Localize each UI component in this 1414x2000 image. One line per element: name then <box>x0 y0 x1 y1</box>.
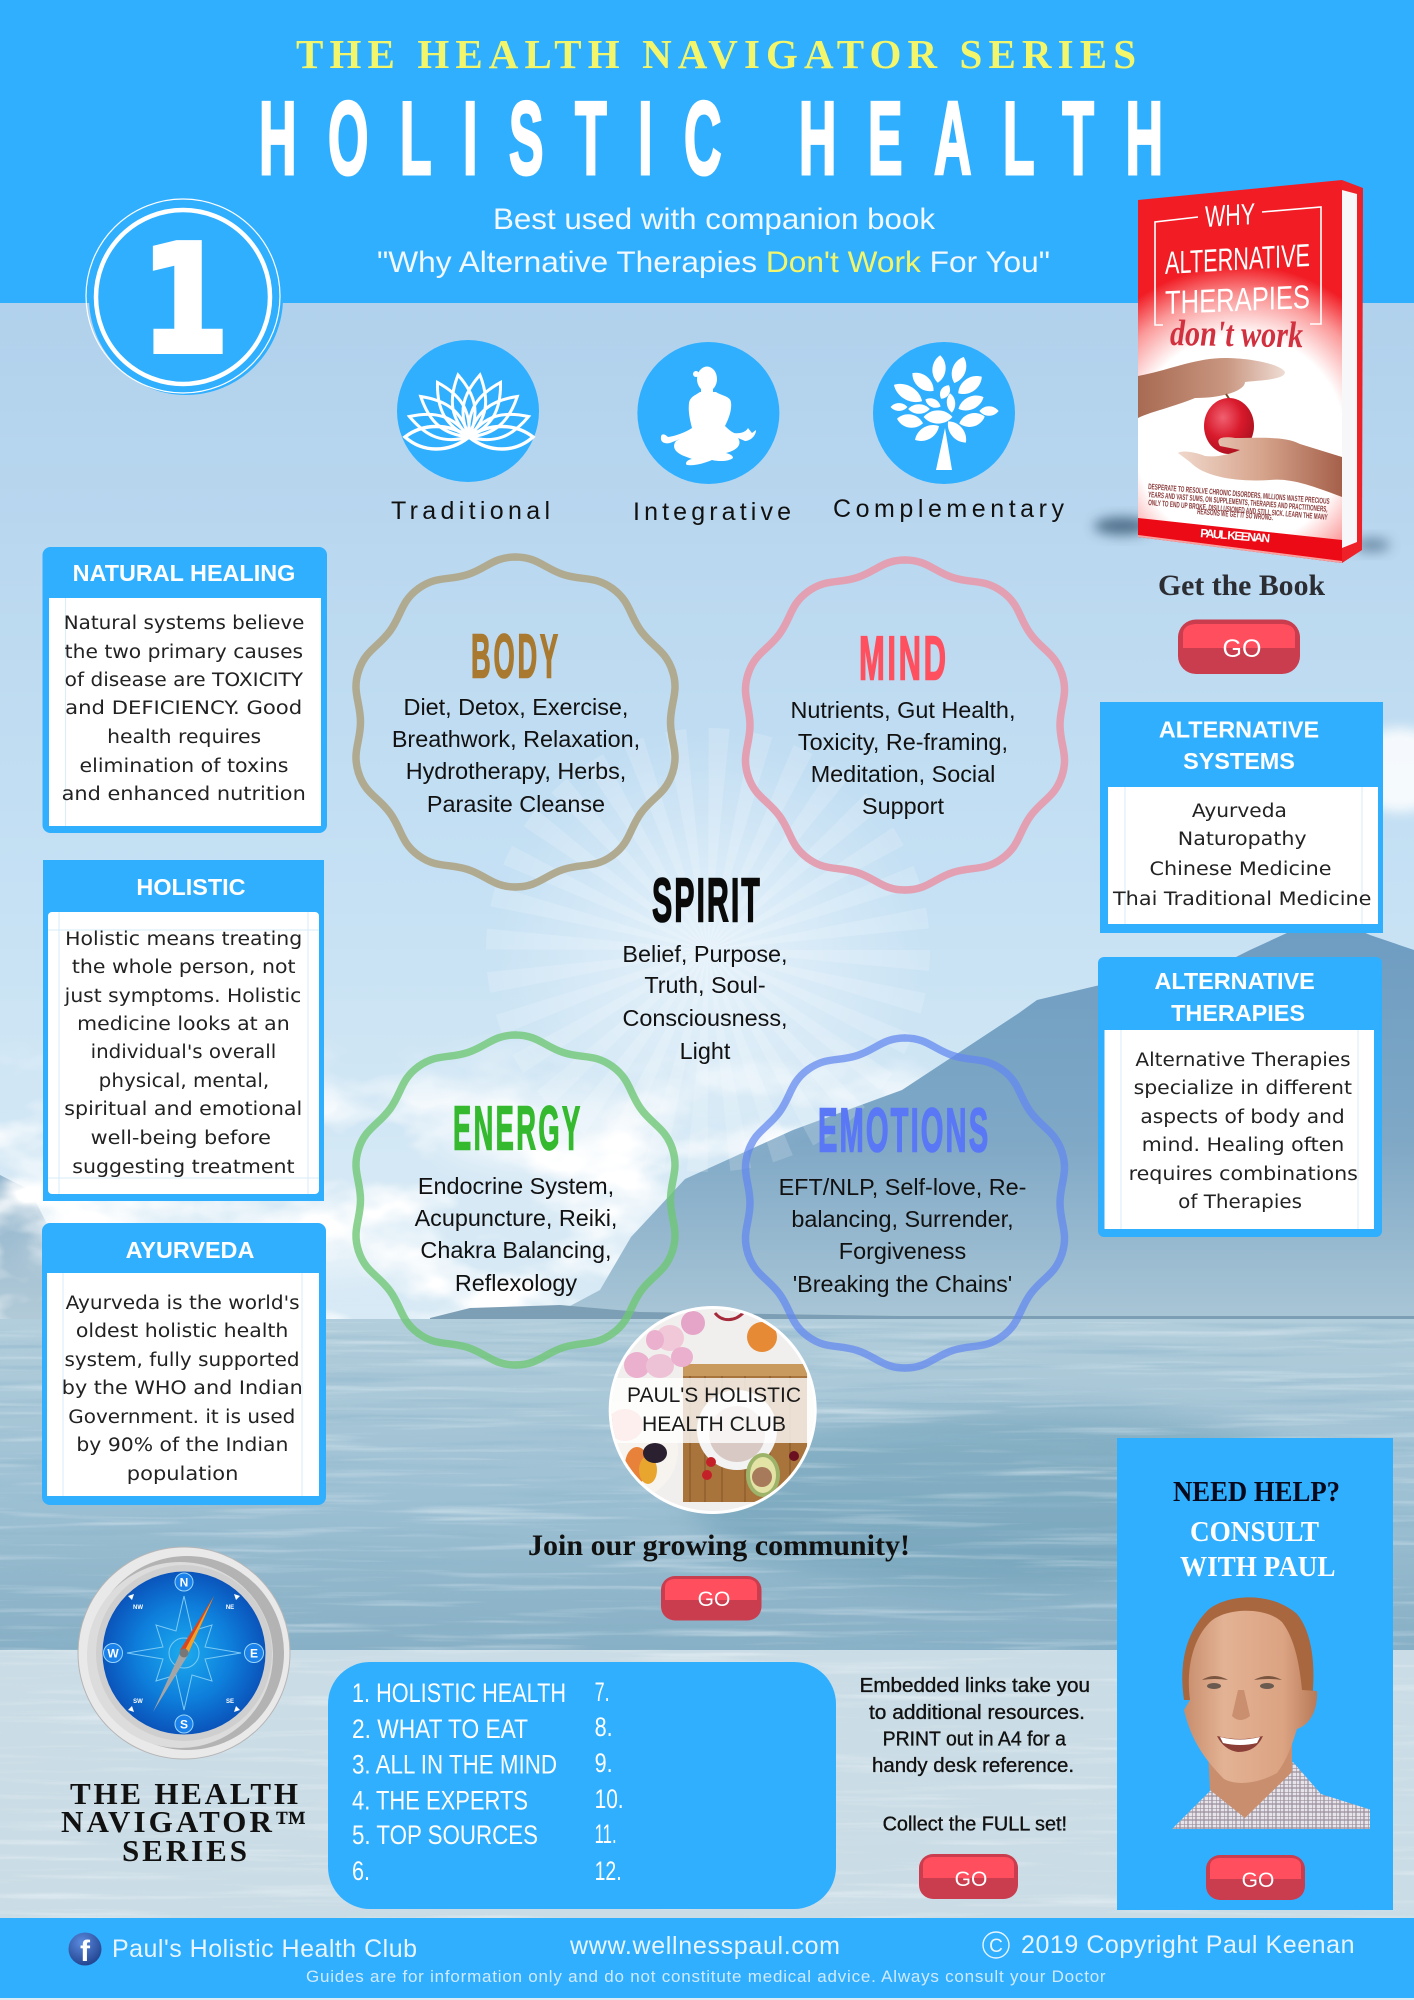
list: spirit: Light <box>680 1038 731 1064</box>
embedded links note: handy desk reference. <box>872 1755 1074 1777</box>
list: body: Breathwork, Relaxation, <box>392 726 640 752</box>
panel: alternative therapies <box>1098 957 1382 1237</box>
portrait of Paul <box>1172 1597 1370 1829</box>
body text: health requires <box>107 727 261 748</box>
heading: mind: MIND <box>859 625 946 693</box>
copyright: 2019 Copyright Paul Keenan <box>1021 1931 1354 1959</box>
body text: Ayurveda <box>1192 801 1287 822</box>
book: Why Alternative Therapies Don't Work: THERAPIES <box>1165 278 1310 321</box>
body text <box>1112 801 1371 910</box>
icon: facebook <box>68 1932 102 1968</box>
list: spirit: Belief, Purpose, <box>622 941 788 967</box>
book: Why Alternative Therapies Don't Work: WHY <box>1205 198 1255 234</box>
button: collect set <box>919 1854 1018 1899</box>
heading: energy: ENERGY <box>453 1095 580 1164</box>
body text: mind. Healing often <box>1142 1135 1344 1156</box>
list: mind: Toxicity, Re-framing, <box>798 729 1008 755</box>
list column 1: 4. THE EXPERTS <box>352 1786 528 1816</box>
ring: emotions <box>718 1013 1092 1393</box>
body text: by the WHO and Indian <box>62 1378 303 1399</box>
list: emotions: balancing, Surrender, <box>791 1206 1014 1232</box>
button: community: GO <box>698 1588 730 1611</box>
body text: Naturopathy <box>1178 829 1307 850</box>
list column 1 <box>352 1678 566 1886</box>
list: mind <box>791 697 1015 819</box>
list: emotions: 'Breaking the Chains' <box>793 1271 1012 1297</box>
list column 1: 2. WHAT TO EAT <box>352 1714 528 1744</box>
heading: HOLISTIC <box>136 874 246 900</box>
book: Why Alternative Therapies Don't Work: don't work <box>1170 313 1303 356</box>
icon labels: Complementary <box>833 495 1064 523</box>
body text <box>64 929 302 1178</box>
disclaimer: Guides are for information only and do not constitute medical advice. Always consult your Doctor <box>306 1967 1106 1986</box>
compass icon: SE <box>226 1699 234 1705</box>
list column 1: 3. ALL IN THE MIND <box>352 1750 557 1780</box>
compass icon: SW <box>133 1699 143 1705</box>
ring: energy <box>329 1010 702 1390</box>
consult heading: NEED HELP? <box>1173 1476 1340 1508</box>
list: mind: Support <box>862 793 944 819</box>
body text: of Therapies <box>1178 1192 1302 1213</box>
body text: Natural systems believe <box>64 613 304 634</box>
list column 2: 8. <box>595 1712 613 1742</box>
heading <box>1159 716 1319 774</box>
panel: series list <box>328 1662 836 1909</box>
list column 2: 11. <box>595 1819 617 1849</box>
embedded links note: PRINT out in A4 for a <box>883 1728 1067 1750</box>
book: Why Alternative Therapies Don't Work <box>1094 180 1390 563</box>
compass icon: E <box>250 1646 258 1660</box>
list: body: Diet, Detox, Exercise, <box>404 694 628 720</box>
club label <box>627 1384 801 1436</box>
book: Why Alternative Therapies Don't Work: PAUL KEENAN <box>1200 526 1271 545</box>
ring: mind <box>718 535 1092 915</box>
heading: SYSTEMS <box>1183 748 1295 774</box>
panel: natural healing <box>42 547 327 833</box>
list column 2: 10. <box>595 1784 624 1814</box>
body text: physical, mental, <box>99 1071 269 1092</box>
embedded links note: Embedded links take you <box>860 1675 1090 1697</box>
main title: HOLISTIC HEALTH <box>259 82 1163 197</box>
list: emotions <box>779 1174 1026 1297</box>
list: emotions: Forgiveness <box>839 1238 966 1264</box>
icon: facebook: f <box>80 1935 91 1968</box>
heading: spirit: SPIRIT <box>652 867 760 935</box>
body text: requires combinations <box>1129 1164 1358 1185</box>
embedded links note: to additional resources. <box>869 1702 1085 1724</box>
icon labels <box>391 495 1064 526</box>
heading: ALTERNATIVE <box>1154 968 1315 994</box>
companion book line: "Why Alternative Therapies Don't Work For You" <box>377 246 1050 279</box>
compass icon: S <box>180 1718 188 1732</box>
ring: body <box>329 532 702 912</box>
heading: AYURVEDA <box>126 1237 254 1263</box>
body text: by 90% of the Indian <box>76 1435 288 1456</box>
heading: THERAPIES <box>1171 1000 1305 1026</box>
list column 1: 6. <box>352 1856 370 1886</box>
heading <box>1154 968 1315 1026</box>
panel: holistic <box>43 860 324 1201</box>
embedded links note <box>860 1675 1090 1836</box>
spirit block <box>622 867 788 1064</box>
companion book line <box>377 203 1050 279</box>
body text: Alternative Therapies <box>1135 1050 1351 1071</box>
get the book label: Get the Book <box>1158 569 1325 602</box>
spirit sunburst rays <box>493 735 923 1165</box>
series name: THE HEALTH <box>70 1776 298 1811</box>
series name: NAVIGATOR™ <box>61 1804 306 1839</box>
body text: specialize in different <box>1134 1078 1352 1099</box>
consult heading: CONSULT <box>1190 1516 1319 1548</box>
body text <box>62 1293 303 1485</box>
consult heading: WITH PAUL <box>1180 1551 1336 1583</box>
list: energy: Endocrine System, <box>418 1173 614 1199</box>
body text: population <box>127 1464 238 1485</box>
body text: Ayurveda is the world's <box>66 1293 300 1314</box>
body text: medicine looks at an <box>77 1014 290 1035</box>
body text: elimination of toxins <box>80 756 288 777</box>
compass icon <box>78 1547 290 1759</box>
series name <box>61 1776 306 1868</box>
list: energy <box>415 1173 617 1296</box>
body text: of disease are TOXICITY <box>65 670 304 691</box>
body text: the two primary causes <box>65 642 303 663</box>
body text: spiritual and emotional <box>64 1099 302 1120</box>
embedded links note: Collect the FULL set! <box>883 1814 1067 1836</box>
body text: the whole person, not <box>72 957 296 978</box>
body text <box>1129 1050 1358 1213</box>
list: body <box>392 694 640 817</box>
website: www.wellnesspaul.com <box>569 1932 840 1960</box>
body text: system, fully supported <box>64 1350 300 1371</box>
list: body: Hydrotherapy, Herbs, <box>406 758 626 784</box>
list: spirit: Consciousness, <box>622 1005 788 1031</box>
button: consult <box>1206 1855 1305 1900</box>
club label: HEALTH CLUB <box>642 1413 786 1436</box>
series subtitle: THE HEALTH NAVIGATOR SERIES <box>296 31 1136 77</box>
icon: meditation figure <box>637 342 779 484</box>
icon labels: Traditional <box>391 497 550 525</box>
list column 2 <box>595 1677 624 1886</box>
list: spirit: Truth, Soul- <box>644 972 766 998</box>
list: energy: Reflexology <box>455 1270 577 1296</box>
icon: tree <box>873 342 1015 484</box>
heading: NATURAL HEALING <box>73 560 295 586</box>
body text: and enhanced nutrition <box>62 784 306 805</box>
heading: emotions: EMOTIONS <box>818 1096 988 1166</box>
body text: suggesting treatment <box>72 1157 295 1178</box>
panel: ayurveda <box>42 1223 326 1505</box>
button: collect set: GO <box>955 1868 987 1891</box>
list column 2: 12. <box>595 1856 622 1886</box>
community label: Join our growing community! <box>528 1529 910 1562</box>
list column 1: 5. TOP SOURCES <box>352 1820 538 1850</box>
body text: well-being before <box>91 1128 271 1149</box>
heading: body: BODY <box>471 623 558 692</box>
body text: Government. it is used <box>68 1407 295 1428</box>
list: emotions: EFT/NLP, Self-love, Re- <box>779 1174 1026 1200</box>
header band <box>0 0 1414 303</box>
list column 2: 7. <box>595 1677 610 1707</box>
badge: number 1: 1 <box>141 215 229 387</box>
list: spirit <box>622 941 788 1064</box>
facebook label: Paul's Holistic Health Club <box>112 1935 417 1963</box>
list: mind: Nutrients, Gut Health, <box>791 697 1015 723</box>
panel: alternative systems <box>1100 702 1383 933</box>
list column 2: 9. <box>595 1748 613 1778</box>
button: consult: GO <box>1242 1869 1274 1892</box>
body text: individual's overall <box>91 1042 276 1063</box>
body text <box>62 613 306 805</box>
list: energy: Acupuncture, Reiki, <box>415 1205 617 1231</box>
list: mind: Meditation, Social <box>811 761 995 787</box>
book: Why Alternative Therapies Don't Work: ALTERNATIVE <box>1165 237 1310 281</box>
compass icon: NW <box>133 1605 143 1611</box>
body text: aspects of body and <box>1140 1107 1345 1128</box>
book: Why Alternative Therapies Don't Work: REASONS WE GET IT SO WRONG. <box>1197 507 1273 522</box>
compass icon: N <box>180 1576 188 1590</box>
body text: just symptoms. Holistic <box>64 986 301 1007</box>
compass icon: W <box>107 1646 119 1660</box>
body text: and DEFICIENCY. Good <box>65 698 302 719</box>
companion book line: Best used with companion book <box>493 203 936 236</box>
body text: Thai Traditional Medicine <box>1112 889 1371 910</box>
button: get the book: GO <box>1223 635 1261 663</box>
club label: PAUL'S HOLISTIC <box>627 1384 801 1407</box>
heading: ALTERNATIVE <box>1159 716 1319 742</box>
series name: SERIES <box>122 1833 247 1868</box>
compass icon: NE <box>226 1605 234 1611</box>
badge: number 1 <box>86 199 283 395</box>
button: get the book <box>1178 620 1300 674</box>
panel: consult with paul <box>1117 1438 1393 1910</box>
body text: Holistic means treating <box>65 929 302 950</box>
club badge: Paul's Holistic Health Club <box>608 1306 817 1514</box>
body text: Chinese Medicine <box>1150 859 1332 880</box>
list column 1: 1. HOLISTIC HEALTH <box>352 1678 566 1708</box>
button: community <box>661 1576 762 1620</box>
footer band <box>0 1918 1414 1998</box>
icon labels: Integrative <box>633 498 791 526</box>
consult heading <box>1173 1476 1340 1583</box>
copyright: C <box>989 1936 1003 1957</box>
list: body: Parasite Cleanse <box>427 791 605 817</box>
list: energy: Chakra Balancing, <box>420 1237 612 1263</box>
body text: oldest holistic health <box>76 1321 288 1342</box>
icon: lotus <box>397 340 539 482</box>
